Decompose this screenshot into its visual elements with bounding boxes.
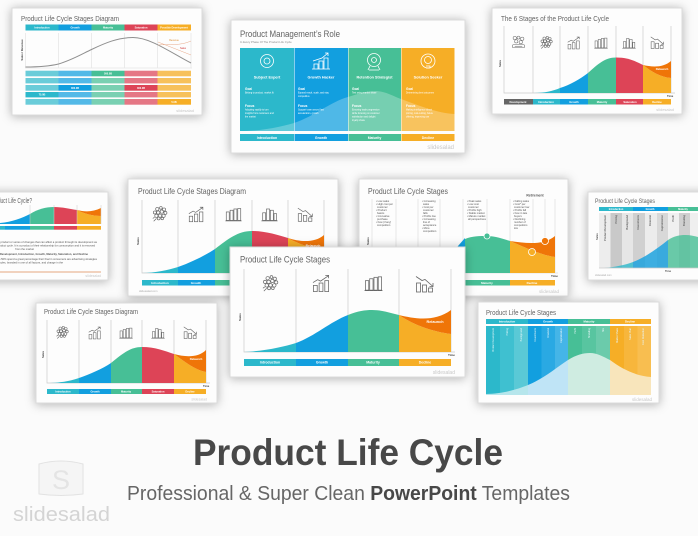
column text: retention strategist: Goal: [352, 87, 359, 91]
heading: stages: Product Life Cycle Stages: [486, 310, 556, 317]
time axis label: Time: [551, 274, 558, 278]
bullet text columns: • Few (if any): [376, 220, 391, 224]
column text: solution seeker: [406, 76, 443, 118]
icon: growth bars: [313, 275, 329, 292]
footer brand: slidesalad: [433, 370, 455, 376]
description text: [0, 240, 98, 264]
column text: growth hacker: Growth Hacker: [307, 76, 335, 80]
data table rows: 5.0B: [171, 101, 177, 104]
footer brand: slidesalad: [632, 397, 652, 402]
column text: retention strategist: while focusing on customer: [352, 112, 380, 115]
column text: retention strategist: Retention Strategist: [356, 76, 393, 80]
bullet text columns: • More: [422, 226, 430, 230]
stage header bar: Decline: [625, 320, 635, 324]
stage header bar: Saturation: [135, 26, 148, 30]
data table rows: 75.0B: [39, 94, 46, 97]
bullet text columns: • Cost per: [422, 205, 434, 209]
stage header bar: [486, 319, 651, 324]
column text: subject expert: insights from customers and: [245, 112, 274, 115]
area curve: [244, 310, 451, 352]
bullet text columns: • Few in late: [513, 211, 528, 215]
four role columns: [240, 48, 454, 131]
icon: product cluster: [263, 276, 278, 291]
heading: 6 stages: The 6 Stages of the Product Life Cycle: [501, 14, 609, 23]
stage header bar: Growth: [70, 26, 80, 30]
column text: growth hacker: Expand reach, scale, and stay: [298, 92, 330, 94]
bullet text columns: competitors: [514, 223, 528, 227]
column text: solution seeker: offering, improving use: [406, 116, 430, 118]
area curve: [47, 347, 206, 383]
stage bar: [504, 99, 671, 104]
slide: product management's role, top centre: [231, 20, 465, 153]
column text: growth hacker: Focus: [298, 104, 308, 108]
bullet text columns: customer low: [514, 205, 529, 209]
area curve: Relaunch: [306, 244, 320, 248]
slide: stages diagram, lower left: [36, 303, 217, 403]
bullet text columns: competition: [377, 223, 391, 227]
grey activity strips: Branding: [683, 215, 686, 226]
bullet text columns: • Product: [376, 208, 387, 212]
bullet text columns: • Mature market: [467, 214, 486, 218]
footer brand: slidesalad: [85, 274, 101, 278]
grey activity strips: Capitalization: [661, 215, 664, 231]
stage header bar: Maturity: [103, 26, 114, 30]
coloured strips: Profit: [574, 328, 577, 334]
area curve: [533, 58, 671, 93]
description text: from the market: [15, 247, 34, 251]
grey activity strips: Pricing: [615, 215, 618, 223]
logo wordmark: slidesalad: [13, 504, 110, 526]
stage bar: [0, 226, 101, 230]
column text: growth hacker: Goal: [298, 87, 305, 91]
stage bar: Introduction: [55, 390, 71, 394]
coloured strips: Market Share: [616, 327, 619, 343]
stage bar: Maturity: [597, 100, 608, 104]
bullet text columns: acceptance: [423, 223, 437, 227]
stage bar: Decline: [185, 390, 195, 394]
axis labels: Time: [665, 269, 672, 273]
bullet text columns: sales: [423, 202, 430, 206]
data table rows: 300.0B: [137, 87, 145, 90]
footer brand: slidesalad: [539, 289, 559, 294]
axis labels: Sales: [498, 59, 502, 67]
stage header bar: [599, 207, 698, 211]
bullet text columns: • Profits fall: [513, 208, 526, 212]
grey activity strips: Product Development: [604, 215, 607, 241]
bullet text columns: • Cost* per: [513, 202, 526, 206]
bullet text columns: • Low cost: [467, 202, 479, 206]
grey activity strips: Profit: [672, 215, 675, 222]
axis: [599, 267, 698, 269]
stage header bar: Introduction: [34, 26, 50, 30]
axis labels: Sales: [41, 350, 45, 358]
bullet text columns: buyers: [514, 214, 522, 218]
axis labels: Sales: [595, 233, 599, 240]
axes and dividers: [244, 269, 455, 352]
slide: stages with coloured strips, lower right: [478, 302, 659, 403]
column text: retention strategist: [352, 76, 393, 122]
heading: stages: Product Life Cycle Stages: [240, 254, 330, 266]
bullet text columns: • Low sales: [376, 199, 390, 203]
column text: solution seeker: Focus: [406, 104, 416, 108]
bullet text columns: • Profits high: [467, 208, 482, 212]
bullet text columns: competition: [423, 229, 437, 233]
slide: stages diagram with data table, top left: [12, 8, 202, 115]
column text: solution seeker: Goal: [406, 87, 413, 91]
column text: retention strategist: satisfaction and delight: [352, 116, 376, 118]
gradient rule: [0, 271, 101, 273]
stage bar: Growth: [316, 360, 328, 364]
stage header bar: Growth: [646, 208, 655, 211]
stage bar: Introduction: [260, 360, 280, 364]
axes and dividers: [372, 199, 558, 273]
footer note: slidesalad.com: [139, 289, 158, 293]
stage bar: Decline: [652, 100, 662, 104]
area curve: [372, 236, 555, 273]
stage bar: Growth: [90, 390, 100, 394]
footer brand: slidesalad: [191, 398, 207, 402]
stage bar: Introduction: [538, 100, 554, 104]
bullet text columns: low: [514, 226, 518, 230]
slide: six stages, top right: [492, 8, 682, 114]
column text: solution seeker: Determining best outcomes: [406, 92, 435, 94]
axis labels: [595, 233, 672, 273]
sales curve chart: Sales / Revenue: [20, 39, 24, 61]
column text: subject expert: Adopting rapidly to turn: [245, 108, 269, 112]
stage bar: Growth: [315, 136, 327, 140]
stage bar: Maturity: [481, 281, 493, 285]
footer note: slidesalad.com: [595, 274, 612, 277]
grey activity strips: [599, 213, 698, 268]
slide: what is product life cycle, left edge: [0, 192, 108, 280]
bullet text columns: • Peak sales: [467, 199, 482, 203]
bullet text columns: • Falling sales: [513, 199, 530, 203]
icon: retention strategist: [368, 54, 380, 70]
stage bar: Maturity: [366, 360, 380, 364]
stage bar: Introduction: [151, 281, 169, 285]
pale area under curve: [486, 353, 651, 395]
bullet text columns: customer: [423, 208, 434, 212]
bullet text columns: [376, 199, 530, 233]
icon: maturity bars: [364, 277, 383, 291]
slide: stages with bullets, middle right: [359, 179, 568, 296]
axis labels: Time: [203, 384, 210, 388]
stage bar: Saturation: [623, 100, 637, 104]
stage bar: [47, 389, 206, 394]
coloured strips: Cost Reduction: [642, 327, 645, 345]
stage header bar: Introduction: [499, 320, 515, 324]
column text: growth hacker: Support team around fast: [298, 108, 324, 112]
column text: subject expert: Subject Expert: [254, 76, 281, 80]
coloured strips: [486, 326, 651, 395]
coloured strips: Capitalization: [560, 327, 563, 343]
stage bar: Growth: [569, 100, 579, 104]
bullet text columns: • Stable market: [467, 211, 485, 215]
column text: retention strategist: Focus: [352, 104, 362, 108]
subtitle: In Every Phase Of The Product Life Cycle: [240, 40, 292, 44]
column text: subject expert: Focus: [245, 104, 255, 108]
footer brand: slidesalad: [427, 145, 454, 151]
column text: growth hacker: acceleration, growth: [298, 112, 319, 115]
bullet text columns: • Increasing: [422, 199, 436, 203]
stage bar: [142, 280, 324, 286]
axis labels: [238, 313, 455, 357]
stage bar: [244, 359, 451, 366]
heading: stages diagram: Product Life Cycle Stages Diagram: [21, 14, 119, 23]
coloured strips: Branding: [588, 327, 591, 338]
bullet text columns: purchase: [377, 217, 388, 221]
bullet text columns: falls: [423, 211, 428, 215]
coloured strips: Investments: [534, 327, 537, 341]
coloured strips: Background: [520, 327, 523, 341]
slide: stages with grey strips, right edge: [588, 192, 698, 280]
stage markers: [484, 233, 548, 256]
subtitle: Professional & Super Clean PowerPoint Templates: [127, 483, 570, 505]
column text: growth hacker: competitive: [298, 95, 310, 98]
heading: stages: Product Life Cycle Stages: [595, 198, 655, 205]
axis labels: Time: [667, 94, 674, 98]
bullet text columns: line of: [423, 220, 430, 224]
stage header bar: Growth: [543, 320, 553, 324]
column text: subject expert: Belong to product. market fit: [245, 92, 274, 94]
bullet text columns: basics: [377, 211, 385, 215]
icon row: [512, 36, 664, 49]
area curve: Relaunch: [190, 357, 203, 361]
coloured strips: Sales Plan: [629, 327, 632, 340]
stage bar: Growth: [191, 281, 201, 285]
axis labels: Sales: [238, 313, 242, 321]
stage header bar: [26, 24, 191, 30]
bullet text columns: all perspectives: [468, 217, 487, 221]
stage bar: [372, 280, 555, 286]
icon row: [153, 207, 312, 222]
slide: stages diagram, middle left: [128, 179, 338, 296]
stage header bar: Introduction: [609, 208, 624, 211]
column text: solution seeker: pricing, cost-cutting, future: [406, 112, 434, 115]
title: Product Life Cycle: [193, 432, 503, 473]
column text: subject expert: the market: [245, 116, 256, 118]
footer brand: slidesalad: [176, 108, 194, 113]
heading: product management's role: Product Management’s Role: [240, 29, 340, 39]
area curve: [142, 231, 324, 273]
coloured strips: Financial: [547, 328, 550, 338]
axis labels: Time: [448, 353, 455, 357]
icon: subject expert: [260, 54, 274, 68]
bullet text columns: number of: [514, 220, 526, 224]
coloured strips: Pricing: [506, 327, 509, 336]
curve overlay: [240, 91, 454, 131]
logo: slidesalad: [13, 461, 110, 526]
coloured strips: Mix: [602, 327, 605, 332]
column text: retention strategist: Test using market share: [352, 92, 377, 94]
grey activity strips: Financial: [649, 215, 652, 226]
icon: growth hacker: [312, 53, 330, 69]
data table rows: [26, 71, 191, 105]
y axis label: Sales: [136, 237, 140, 245]
bullet text columns: • Increasing: [422, 217, 436, 221]
y axis label: Sales: [366, 237, 370, 245]
heading: stages diagram: Product Life Cycle Stages Diagram: [44, 307, 138, 316]
stage bar: Decline: [422, 136, 434, 140]
stage header bar: Maturity: [678, 208, 688, 211]
axes and dividers: [142, 200, 330, 273]
stage header bar: Possible Development: [160, 26, 188, 30]
stage bar: Decline: [419, 360, 431, 364]
area curve: Relaunch: [656, 67, 669, 71]
relaunch label: Relaunch: [426, 320, 444, 324]
icon: declining bars: [416, 276, 433, 292]
icon row: [56, 326, 196, 339]
axis labels: [498, 59, 674, 98]
heading: stages: Product Life Cycle Stages: [368, 186, 448, 196]
column text: subject expert: Goal: [245, 87, 252, 91]
column text: retention strategist: Ensuring trade progression: [352, 108, 380, 112]
stage bar: [240, 134, 454, 141]
stage bar: Decline: [527, 281, 538, 285]
data table rows: 500.0B: [104, 72, 112, 76]
sales curve chart: [20, 33, 192, 68]
stage bar: Saturation: [152, 390, 165, 394]
logo mark: S: [52, 465, 70, 495]
stage bar: Development: [510, 100, 527, 104]
column text: solution seeker: Solution Seeker: [414, 76, 443, 80]
stage header bar: Maturity: [584, 320, 595, 324]
axis labels: [41, 350, 210, 388]
bullet text columns: • High cost per: [376, 202, 393, 206]
stage bar: Introduction: [257, 136, 277, 140]
data table rows: 300.0B: [71, 87, 79, 90]
axes and dividers: [504, 26, 675, 93]
column text: retention strategist: loyalty share: [352, 119, 366, 122]
coloured strips: Product Development: [492, 328, 495, 352]
axes and dividers: [47, 320, 210, 383]
retirement label: Retirement: [526, 194, 545, 198]
area curve: [0, 205, 101, 224]
icon: solution seeker: [421, 54, 435, 68]
bullet text columns: • Declining: [513, 217, 526, 221]
area curve: [604, 235, 698, 268]
column text: solution seeker: Making intelligence about: [406, 108, 432, 112]
bullet text columns: • Profits rise: [422, 214, 436, 218]
sales curve chart: Revenue: [169, 39, 179, 42]
bullet text columns: customer: [377, 205, 388, 209]
grey activity strips: Investments: [637, 214, 640, 230]
column text: subject expert: [245, 76, 281, 118]
bullet text columns: customer: [468, 205, 479, 209]
bullet text columns: • Innovative: [376, 214, 390, 218]
stage bar: Maturity: [121, 390, 132, 394]
heading: stages diagram: Product Life Cycle Stages Diagram: [138, 186, 246, 196]
slide: product life cycle stages, front centre: [230, 247, 465, 377]
footer brand: slidesalad: [656, 107, 674, 112]
grey activity strips: Background: [626, 215, 629, 230]
stage bar: Maturity: [368, 136, 381, 140]
sales curve chart: Sales: [180, 47, 187, 50]
column text: growth hacker: [298, 76, 335, 115]
